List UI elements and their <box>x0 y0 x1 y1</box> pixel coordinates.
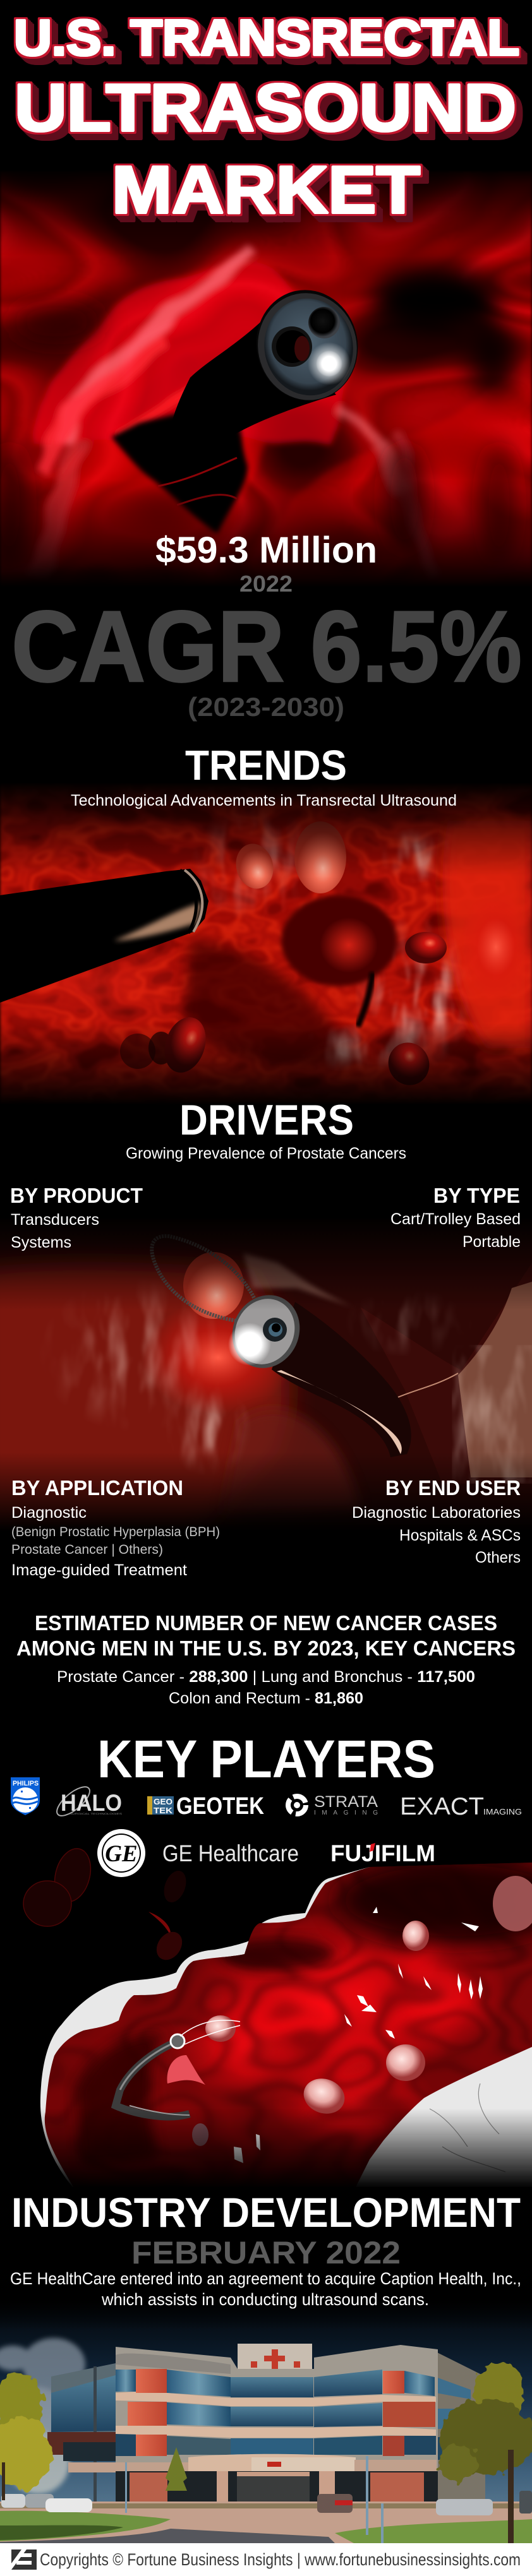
red silk background <box>0 167 532 596</box>
logo: Strata Imaging <box>288 1793 378 1816</box>
light poles <box>125 2456 384 2543</box>
hospital building scene <box>0 2298 532 2543</box>
market value year: 2022 <box>239 571 293 597</box>
tissue glow and folds <box>44 1863 532 2169</box>
rooftop sign <box>238 2344 312 2369</box>
drivers heading: DRIVERS <box>179 1096 354 1144</box>
segment: by end user: Diagnostic Laboratories <box>352 1504 521 1522</box>
title <box>14 9 519 227</box>
cancer case figures: Prostate Cancer - 288,300 | Lung and Bronchus - 117,500 <box>57 1668 475 1686</box>
cancer cases heading <box>16 1611 516 1660</box>
icon: endoscope head <box>221 1284 311 1379</box>
pale membrane at top <box>243 1253 354 1307</box>
segment: by type: Portable <box>462 1233 521 1251</box>
development date: FEBRUARY 2022 <box>131 2235 401 2270</box>
window band lower <box>116 2434 436 2456</box>
CAGR period: (2023-2030) <box>188 692 344 722</box>
title: MARKET <box>112 153 420 227</box>
dark silk folds <box>0 265 518 568</box>
colon illustration <box>0 1844 532 2200</box>
dark cavity under probe <box>111 410 248 534</box>
segment: by end user: Hospitals & ASCs <box>399 1527 521 1544</box>
pavement and lawns <box>0 2501 532 2543</box>
icon: ultrasound probe <box>169 280 368 442</box>
trends heading: TRENDS <box>185 742 347 789</box>
ground floor <box>116 2471 438 2504</box>
polyp: lower left with shadow <box>120 1012 212 1078</box>
polyp pink <box>167 2055 205 2085</box>
segment: by type: BY TYPE <box>433 1184 520 1207</box>
logo: GE Healthcare: GE Healthcare <box>162 1840 299 1866</box>
red pillars <box>128 2369 435 2456</box>
cars <box>1 2491 532 2515</box>
icon: endoscope shaft <box>0 869 209 1003</box>
logo: Strata Imaging: IMAGING <box>314 1810 378 1816</box>
entrance canopy <box>68 2454 437 2472</box>
polyp: right <box>405 932 447 963</box>
cancer cases panel <box>16 1611 516 1707</box>
window band upper <box>116 2370 435 2397</box>
left tissue <box>0 1261 294 1547</box>
segment: by type: Cart/Trolley Based <box>390 1210 521 1228</box>
segment: by application: Prostate Cancer | Others) <box>11 1542 163 1557</box>
logo: Halo: SURGICAL TECHNOLOGIES <box>70 1812 123 1815</box>
small conifer tree <box>166 2447 187 2491</box>
logo: Exact Imaging: IMAGING <box>483 1807 522 1816</box>
polyp <box>386 2044 425 2081</box>
segment: by product: Transducers <box>11 1211 99 1229</box>
logo: Strata Imaging: STRATA <box>314 1793 378 1811</box>
polyp: top small <box>231 840 278 893</box>
clouds <box>0 2338 85 2494</box>
segment: by type <box>390 1184 521 1251</box>
icon: miniature endoscope <box>116 2020 240 2116</box>
floating blood cells <box>23 1844 190 1965</box>
right wing <box>436 2352 485 2500</box>
segment: by application: (Benign Prostatic Hyperplasia (BPH) <box>11 1525 220 1539</box>
development description: which assists in conducting ultrasound scans. <box>101 2290 429 2309</box>
tumour mass in lumen <box>281 895 397 1027</box>
logo: GE Healthcare: GE <box>105 1841 138 1867</box>
logo: Philips <box>11 1777 40 1815</box>
left tree <box>0 2374 52 2500</box>
logo: Philips: PHILIPS <box>13 1780 39 1787</box>
polyp: dim <box>192 2123 209 2146</box>
logo: Halo: HALO <box>61 1790 122 1816</box>
segment: by product: Systems <box>11 1234 71 1251</box>
floor bands <box>116 2392 436 2438</box>
icon: endoscope shaft <box>272 1302 411 1457</box>
window band middle <box>167 2402 382 2427</box>
logo: Geotek: GEO <box>154 1797 172 1806</box>
segment: by product <box>10 1184 143 1251</box>
segment: by end user: Others <box>475 1549 521 1566</box>
specular highlights <box>234 1907 483 2163</box>
cancer cases heading: ESTIMATED NUMBER OF NEW CANCER CASES <box>35 1611 497 1635</box>
white outer shell <box>40 1867 532 2191</box>
polyp <box>402 1921 429 1951</box>
polyp <box>299 2073 349 2120</box>
logo: GE Healthcare <box>97 1829 299 1877</box>
icon: coil snare <box>152 1236 261 1325</box>
left wing <box>47 2363 117 2505</box>
segment: by end user: BY END USER <box>385 1476 521 1500</box>
icon: Fortune Business Insights logo <box>11 2549 37 2570</box>
logo: Exact Imaging: EXACT <box>400 1793 484 1820</box>
logo: Geotek: TEK <box>154 1806 173 1815</box>
segment: by product: BY PRODUCT <box>10 1184 143 1207</box>
right tree <box>439 2363 532 2543</box>
hero image: red silk with ultrasound probe <box>0 167 532 596</box>
polyp: top large <box>294 821 346 893</box>
segment: by application <box>11 1476 220 1579</box>
market value: $59.3 Million <box>155 530 377 571</box>
logo: Fujifilm: FUJIFILM <box>330 1840 435 1866</box>
footer <box>0 2543 532 2576</box>
polyp: lower right <box>382 1036 436 1092</box>
cancer case figures: Colon and Rectum - 81,860 <box>169 1690 363 1707</box>
cancer cases heading: AMONG MEN IN THE U.S. BY 2023, KEY CANCERS <box>16 1637 516 1660</box>
glowing tissue <box>0 821 532 1066</box>
trends image: colon interior with probe <box>0 782 532 1114</box>
right tissue folds <box>221 1263 532 1515</box>
title: U.S. TRANSRECTAL <box>14 9 519 66</box>
red interior <box>38 1856 532 2197</box>
cancer case figures <box>57 1668 475 1707</box>
segment: by application: Diagnostic <box>11 1504 87 1522</box>
title: ULTRASOUND <box>15 71 516 145</box>
trends description: Technological Advancements in Transrectal Ultrasound <box>71 792 457 809</box>
marble surface <box>430 2084 505 2172</box>
key players heading: KEY PLAYERS <box>97 1729 435 1789</box>
segment: by application: Image-guided Treatment <box>11 1561 187 1579</box>
segmentation image: probe in tissue <box>0 1215 532 1587</box>
logo: Halo <box>52 1782 123 1821</box>
logo: Geotek <box>147 1793 264 1820</box>
sky <box>0 2298 532 2543</box>
logo: Exact Imaging <box>400 1793 522 1820</box>
development description <box>10 2269 521 2309</box>
main upper facade <box>116 2345 438 2500</box>
segment: by end user <box>352 1476 521 1566</box>
polyp: upper right <box>493 1876 532 1931</box>
polyp held by snare <box>205 2015 236 2042</box>
drivers description: Growing Prevalence of Prostate Cancers <box>126 1145 406 1162</box>
building <box>47 2344 485 2505</box>
segment: by application: BY APPLICATION <box>11 1476 183 1500</box>
polyp held by coil <box>183 1252 244 1319</box>
logo: Geotek: GEOTEK <box>176 1793 264 1820</box>
